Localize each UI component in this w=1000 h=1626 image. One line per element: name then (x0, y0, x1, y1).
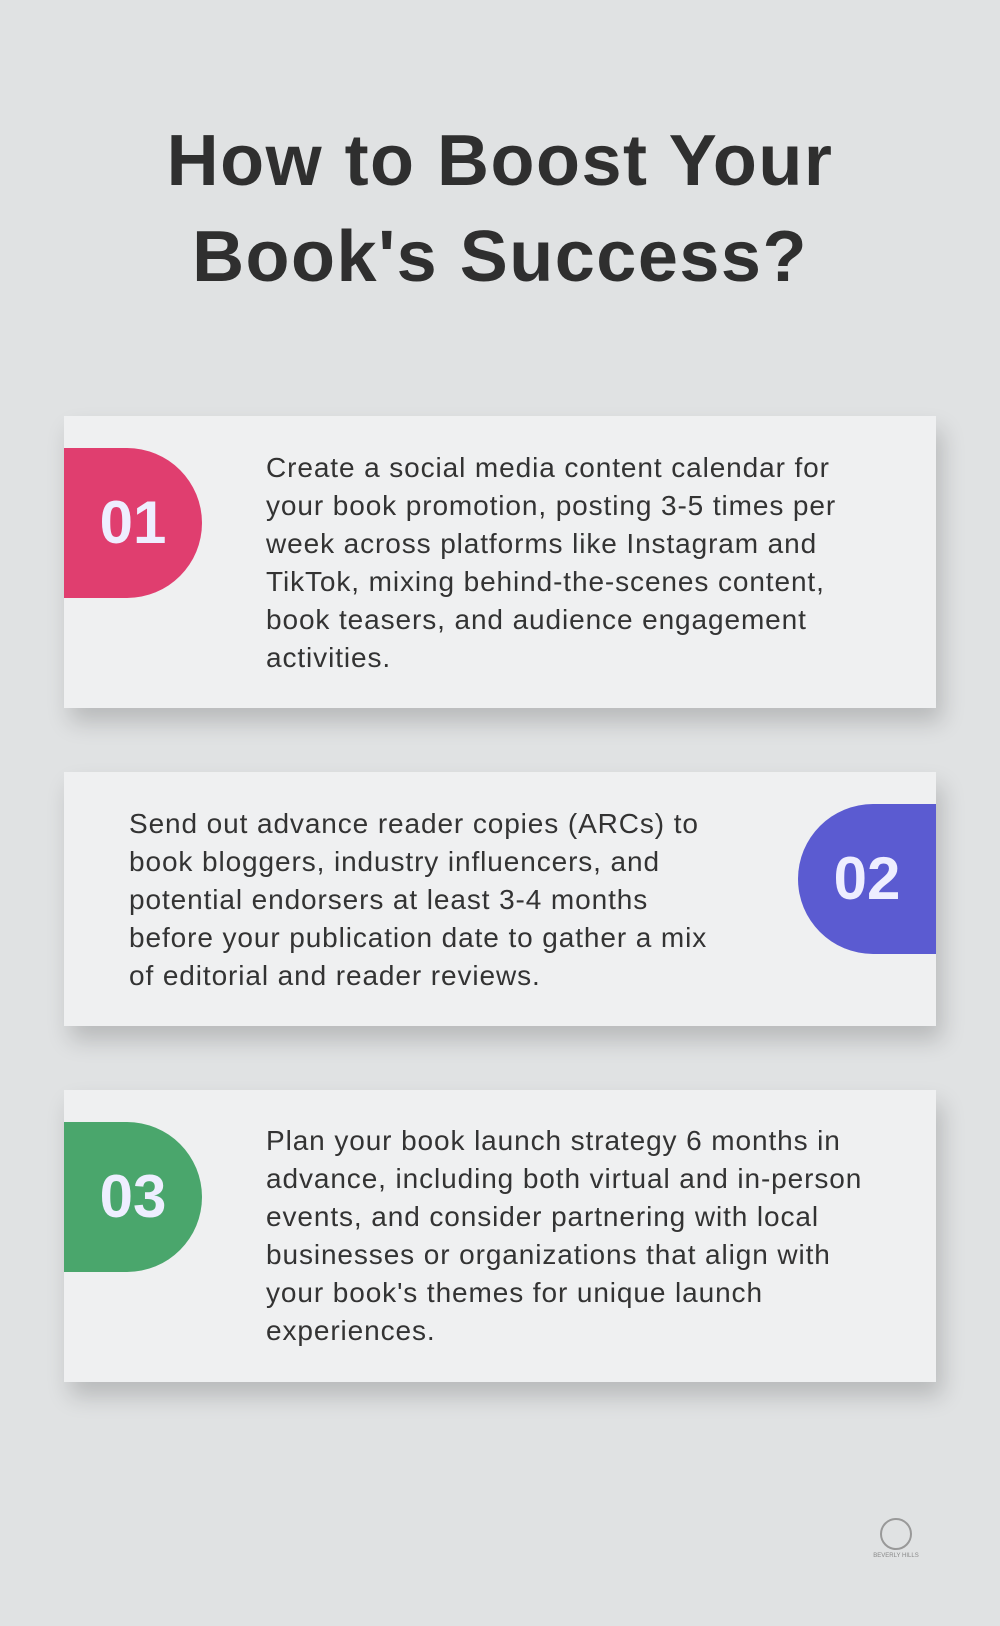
text 3: advance, including both virtual and in-person (266, 1163, 862, 1194)
card 1 (64, 416, 936, 708)
text 2: Send out advance reader copies (ARCs) to (129, 808, 699, 839)
text 3: Plan your book launch strategy 6 months in (266, 1125, 841, 1156)
card 3 (64, 1090, 936, 1382)
text 2: of editorial and reader reviews. (129, 960, 541, 991)
text 3: events, and consider partnering with local (266, 1201, 819, 1232)
text 1: Create a social media content calendar for (266, 452, 830, 483)
text 2: book bloggers, industry influencers, and (129, 846, 660, 877)
logo (873, 1518, 919, 1559)
logo: BEVERLY HILLS (873, 1553, 919, 1559)
text 1 (266, 452, 836, 673)
text 1: activities. (266, 642, 391, 673)
text 2: potential endorsers at least 3-4 months (129, 884, 648, 915)
badge 02 (798, 804, 936, 954)
title: How to Boost Your (167, 121, 833, 201)
badge 01 (64, 448, 202, 598)
title: Book's Success? (192, 217, 808, 297)
text 3: your book's themes for unique launch (266, 1277, 763, 1308)
title (167, 121, 833, 297)
text 1: your book promotion, posting 3-5 times per (266, 490, 836, 521)
text 1: book teasers, and audience engagement (266, 604, 807, 635)
badge 03 (64, 1122, 202, 1272)
text 1: week across platforms like Instagram and (266, 528, 817, 559)
text 2 (129, 808, 707, 991)
badge 01: 01 (100, 489, 166, 556)
text 3: experiences. (266, 1315, 436, 1346)
text 2: before your publication date to gather a mix (129, 922, 707, 953)
card 2 (64, 772, 936, 1026)
badge 03: 03 (100, 1163, 166, 1230)
text 1: TikTok, mixing behind-the-scenes content, (266, 566, 825, 597)
text 3 (266, 1125, 862, 1346)
badge 02: 02 (834, 845, 900, 912)
text 3: businesses or organizations that align with (266, 1239, 831, 1270)
